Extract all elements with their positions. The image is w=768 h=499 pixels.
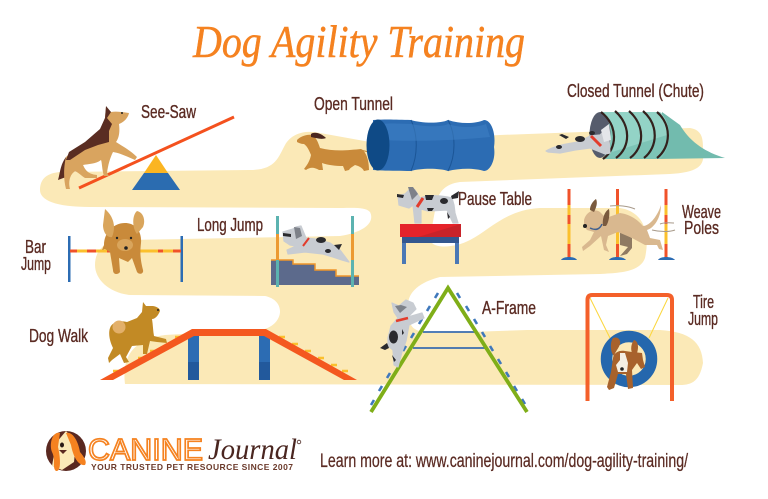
station: see-saw — [58, 106, 234, 190]
label: Dog Walk: Dog Walk — [29, 326, 89, 346]
crossbars — [413, 332, 486, 348]
wordmark CANINE: CANINE — [88, 432, 203, 467]
label: Tire Jump — [688, 292, 718, 329]
ramp — [100, 329, 357, 380]
chute cloth — [655, 112, 725, 159]
stairs — [271, 260, 359, 285]
frame — [371, 288, 527, 412]
pole 2 — [609, 189, 626, 260]
dog: dachshund — [297, 133, 372, 171]
station: tire jump — [588, 295, 672, 401]
label: Long Jump: Long Jump — [197, 215, 263, 235]
station: weave poles — [561, 189, 675, 260]
label: Bar Jump: Bar — [25, 237, 46, 257]
pole 1 — [561, 189, 577, 260]
frame — [588, 295, 672, 401]
station: pause table — [397, 187, 461, 264]
tunnel mouth — [590, 112, 610, 158]
logo dog head — [46, 431, 86, 471]
station: long jump — [271, 216, 359, 287]
label: Pause Table: Pause Table — [458, 189, 532, 209]
frame blue tabs — [371, 293, 525, 405]
left pole — [276, 216, 279, 287]
tire — [606, 336, 652, 382]
right pole — [351, 216, 354, 287]
station: dog walk — [100, 302, 357, 380]
tunnel barrel — [601, 112, 669, 159]
blue tube — [373, 120, 495, 171]
see-saw plank — [79, 117, 234, 188]
left pole — [68, 236, 70, 282]
station: A-frame — [371, 288, 527, 412]
dog: spotted dog climbing — [380, 300, 424, 367]
crossbar — [70, 250, 181, 252]
title: Dog Agility Training — [192, 17, 525, 67]
dog: spotted dog entering chute — [546, 124, 611, 154]
table top — [400, 224, 461, 237]
dog: german shepherd — [58, 106, 137, 189]
tire ropes — [590, 298, 668, 338]
support posts — [188, 336, 270, 380]
right pole — [180, 236, 183, 282]
wordmark Journal: Journal — [208, 433, 297, 466]
dog: brown puppy in tire — [607, 337, 645, 390]
registered mark — [297, 440, 301, 444]
station: closed tunnel — [546, 111, 725, 159]
dog: spotted dog on table — [397, 187, 459, 223]
see-saw fulcrum — [132, 155, 180, 190]
pole 3 — [658, 189, 675, 260]
label: Tire Jump: Tire — [693, 292, 714, 312]
label: Open Tunnel: Open Tunnel — [314, 94, 393, 114]
station: open tunnel — [297, 120, 495, 171]
dog: golden puppy — [102, 209, 144, 274]
dog: tan dog weaving — [582, 199, 675, 256]
label: Bar Jump: Jump — [21, 254, 51, 274]
label: Weave Poles — [682, 202, 721, 238]
tunnel rings — [601, 111, 668, 159]
dog: spotted dog leaping — [283, 226, 349, 262]
label: Closed Tunnel (Chute): Closed Tunnel (Chute) — [567, 81, 704, 101]
station: bar jump — [68, 209, 183, 282]
label: Weave Poles: Poles — [684, 218, 719, 238]
label: Tire Jump: Jump — [688, 309, 718, 329]
tagline: YOUR TRUSTED PET RESOURCE SINCE 2007 — [91, 462, 293, 472]
dog: shiba — [108, 302, 167, 363]
label: A-Frame: A-Frame — [482, 298, 536, 318]
label: See-Saw: See-Saw — [141, 102, 197, 122]
label: Weave Poles: Weave — [682, 202, 721, 222]
ramp step tabs — [113, 337, 348, 371]
label: Bar Jump — [21, 237, 51, 274]
table legs and frame — [402, 237, 459, 264]
winding cream path background — [40, 128, 703, 385]
Canine Journal logo — [46, 431, 301, 472]
